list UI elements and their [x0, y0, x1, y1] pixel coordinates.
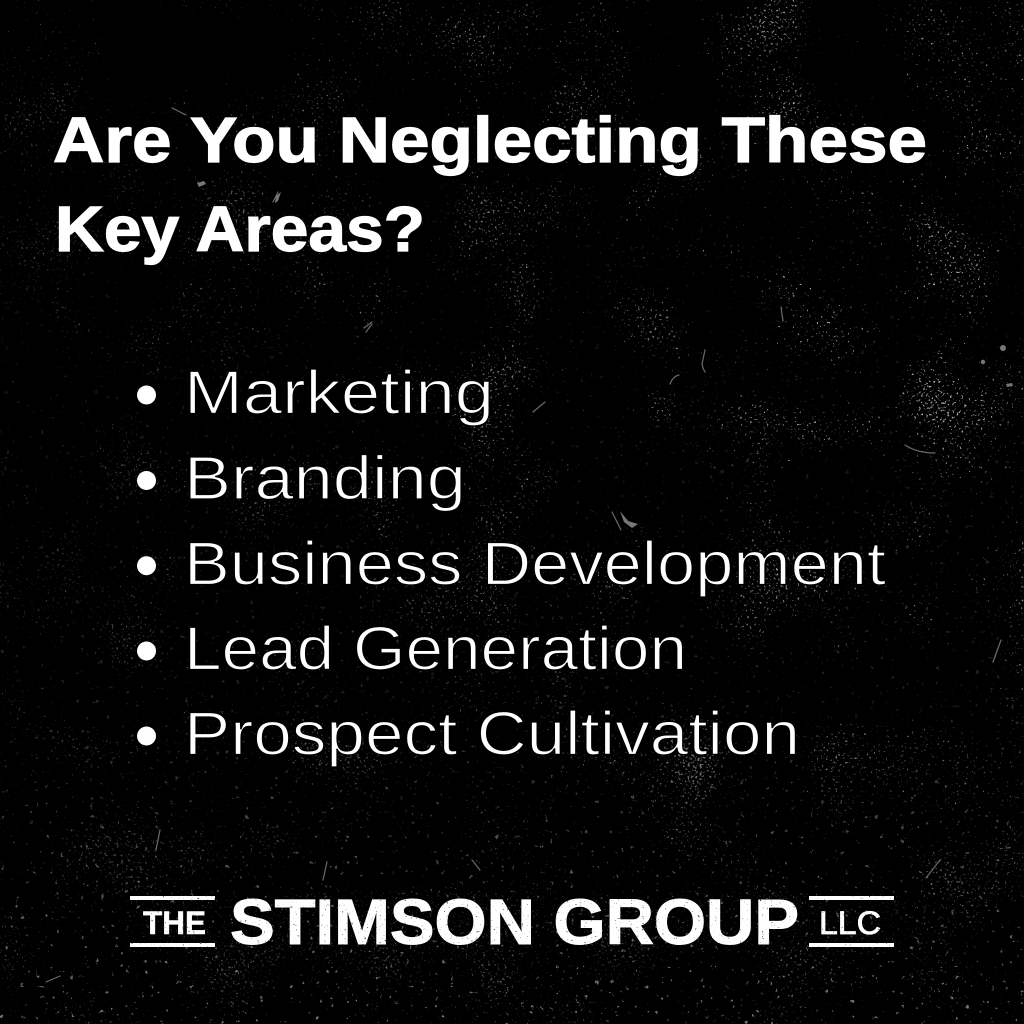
item: Marketing: Marketing [184, 358, 494, 426]
logo: LLC with rules [809, 896, 894, 947]
title: Are You Neglecting These [53, 104, 927, 176]
item: Prospect Cultivation: Prospect Cultivation [184, 700, 800, 768]
distress specks over logo [125, 890, 900, 952]
logo: THE with rules [130, 896, 215, 947]
logo: LLC with rules: LLC [819, 905, 881, 941]
title [53, 104, 927, 265]
item: Business Development: Business Development [184, 530, 886, 598]
logo: STIMSON GROUP wordmark: STIMSON GROUP [230, 886, 799, 958]
item: Branding: Branding [184, 444, 466, 512]
logo: The Stimson Group LLC [130, 886, 894, 958]
logo: THE with rules: THE [143, 905, 206, 941]
title: Key Areas? [55, 193, 425, 265]
bullet list [137, 358, 886, 768]
item: Lead Generation: Lead Generation [184, 614, 687, 682]
